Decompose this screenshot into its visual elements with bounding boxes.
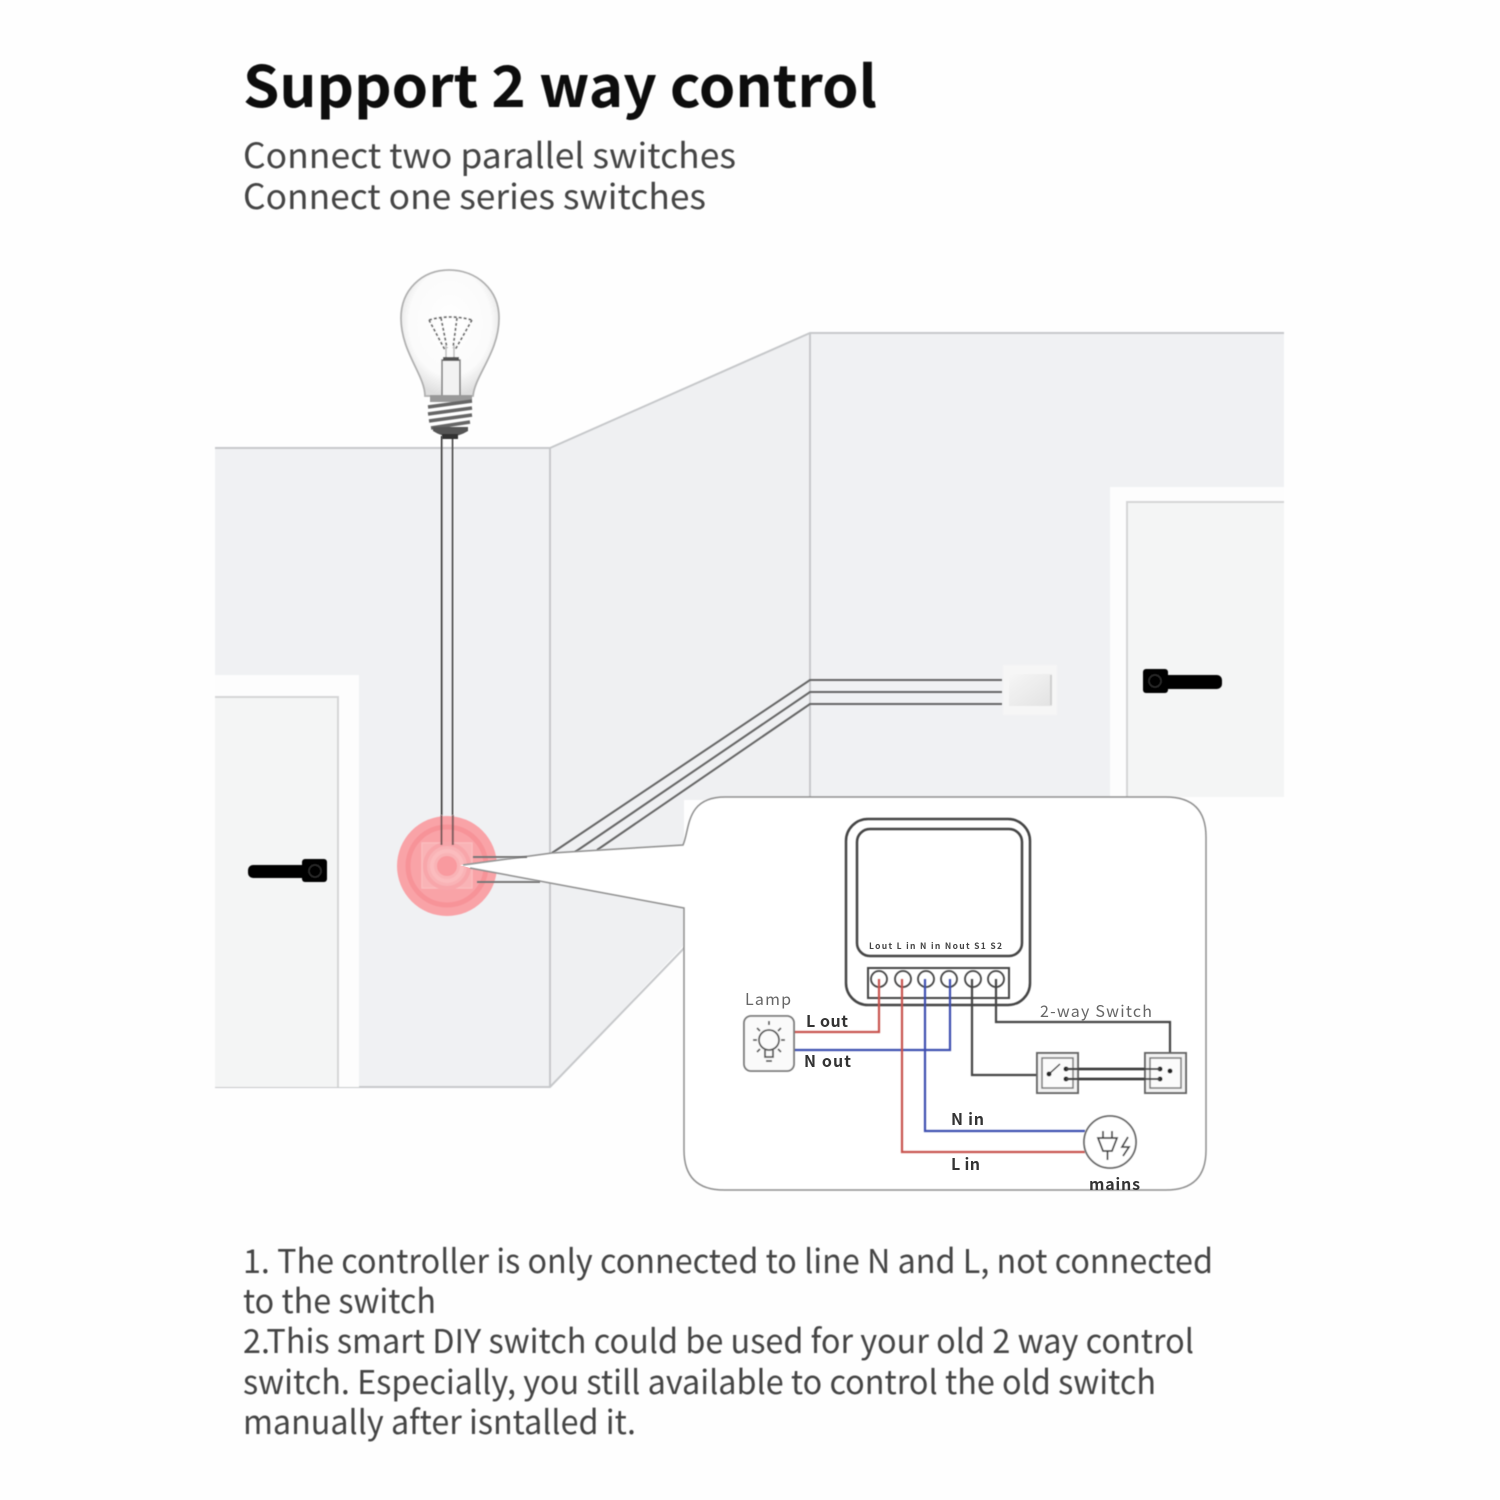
notes text: switch. Especially, you still available to control the old switch <box>243 1356 1156 1404</box>
icon: right door handle <box>1143 669 1222 693</box>
icon: left door handle <box>248 859 327 882</box>
icon: first 2-way switch <box>1037 1053 1078 1093</box>
L in label: L in <box>951 1151 980 1175</box>
subtitle text: Connect one series switches <box>243 169 706 219</box>
wires from controller to wall switch <box>552 680 1002 853</box>
mains label: mains <box>1089 1171 1140 1195</box>
icon: wall switch <box>1003 665 1057 715</box>
red highlight around controller <box>397 815 497 916</box>
notes text: to the switch <box>243 1275 436 1323</box>
N in label: N in <box>951 1106 984 1130</box>
L out label: L out <box>806 1008 848 1032</box>
subtitle text <box>243 128 736 219</box>
wires: S1 and S2 to 2-way switches <box>972 979 1170 1079</box>
notes text: 2.This smart DIY switch could be used for your old 2 way control <box>243 1315 1194 1363</box>
terminal labels: Lout L in N in Nout S1 S2 <box>869 940 1002 952</box>
subtitle text: Connect two parallel switches <box>243 128 736 178</box>
notes text: manually after isntalled it. <box>243 1396 636 1444</box>
wires: L out and N out to lamp <box>794 979 950 1050</box>
icon: mains plug <box>1084 1116 1136 1168</box>
left door <box>215 675 359 1087</box>
N out label: N out <box>804 1048 851 1072</box>
callout panel: wiring diagram <box>460 797 1206 1195</box>
icon: light bulb <box>401 270 499 439</box>
wires from lamp to controller <box>442 436 453 815</box>
title: Support 2 way control <box>243 42 877 124</box>
notes text: 1. The controller is only connected to line N and L, not connected <box>243 1235 1213 1283</box>
room illustration: walls and doors <box>215 333 1284 1087</box>
controller device <box>846 819 1030 1005</box>
lamp label: Lamp <box>745 986 791 1010</box>
right door <box>1110 487 1284 797</box>
wires: L in and N in to mains <box>902 979 1085 1152</box>
2-way switch label: 2-way Switch <box>1040 998 1152 1022</box>
icon: lamp <box>744 1016 794 1071</box>
notes text <box>243 1235 1213 1444</box>
icon: second 2-way switch <box>1066 1053 1186 1093</box>
